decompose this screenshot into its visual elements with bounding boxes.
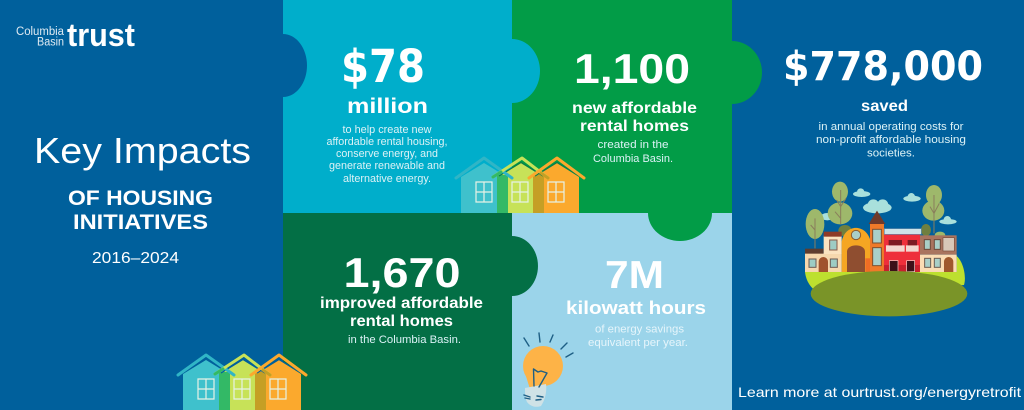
stat: 1,100 new homes	[572, 45, 697, 165]
panel: light blue kilowatt hours	[512, 213, 732, 410]
front hill	[811, 271, 967, 316]
logo: Columbia Basin Trust	[16, 17, 135, 53]
logo: Columbia Basin Trust: Columbia	[16, 26, 65, 38]
stat: 1,100 new homes: Columbia Basin.	[593, 153, 673, 165]
shrubs	[838, 224, 945, 238]
stat: $78 million: $78	[341, 40, 425, 93]
stat: $778,000 saved: non-profit affordable housing	[816, 134, 966, 146]
panel: right savings background	[732, 0, 1024, 410]
heading: of housing initiatives	[68, 187, 213, 234]
stat: 1,670 improved homes: rental homes	[350, 313, 453, 330]
panel: cyan funding	[283, 0, 540, 213]
heading: of housing initiatives: INITIATIVES	[73, 211, 208, 234]
date range: 2016–2024	[92, 250, 179, 267]
stat: 7M kilowatt hours	[566, 254, 706, 349]
stat: $78 million	[326, 40, 448, 185]
stat: 1,670 improved homes: 1,670	[344, 249, 460, 296]
stat: $78 million: to help create new	[342, 124, 432, 136]
heading: of housing initiatives: OF HOUSING	[68, 187, 213, 210]
stat: 1,100 new homes: rental homes	[580, 118, 689, 135]
trees	[806, 182, 944, 239]
stat: $78 million: generate renewable and	[329, 160, 445, 172]
stat: 1,670 improved homes: in the Columbia Basin.	[348, 334, 461, 346]
stat: 7M kilowatt hours: kilowatt hours	[566, 298, 706, 318]
heading: Key Impacts: Key Impacts	[34, 130, 251, 171]
logo: Columbia Basin Trust: trust	[67, 17, 135, 53]
stat: 1,670 improved homes	[320, 249, 483, 346]
stat: $778,000 saved: societies.	[867, 148, 915, 160]
icon: houses bottom	[178, 355, 306, 410]
stat: 1,100 new homes: 1,100	[574, 45, 690, 92]
stat: 7M kilowatt hours: equivalent per year.	[588, 337, 688, 349]
link: learn more: Learn more at ourtrust.org/energyretrofit	[738, 384, 1021, 400]
stat: $778,000 saved: saved	[861, 98, 908, 115]
stat: $78 million: million	[347, 95, 428, 118]
stat: $78 million: affordable rental housing,	[326, 136, 448, 148]
stat: 1,670 improved homes: improved affordable	[320, 295, 483, 312]
icon: houses top	[456, 158, 584, 213]
icon: light bulb	[523, 333, 573, 407]
back hill	[805, 256, 965, 295]
panel: left intro background	[0, 0, 283, 410]
stat: 7M kilowatt hours: of energy savings	[595, 324, 685, 336]
panel: dark green improved homes	[283, 213, 538, 410]
clouds	[821, 188, 957, 224]
panel: green new rental homes	[512, 0, 762, 241]
stat: 7M kilowatt hours: 7M	[605, 254, 664, 297]
stat: 1,100 new homes: created in the	[598, 139, 668, 151]
stat: $778,000 saved: in annual operating costs for	[818, 121, 964, 133]
illustration: village on a hill	[805, 182, 967, 316]
stat: $78 million: alternative energy.	[343, 173, 431, 185]
stat: $778,000 saved: $778,000	[783, 44, 983, 90]
logo: Columbia Basin Trust: Basin	[37, 36, 64, 48]
stat: $78 million: conserve energy, and	[336, 148, 438, 160]
stat: $778,000 saved	[783, 44, 983, 160]
buildings	[805, 253, 842, 272]
stat: 1,100 new homes: new affordable	[572, 100, 697, 117]
